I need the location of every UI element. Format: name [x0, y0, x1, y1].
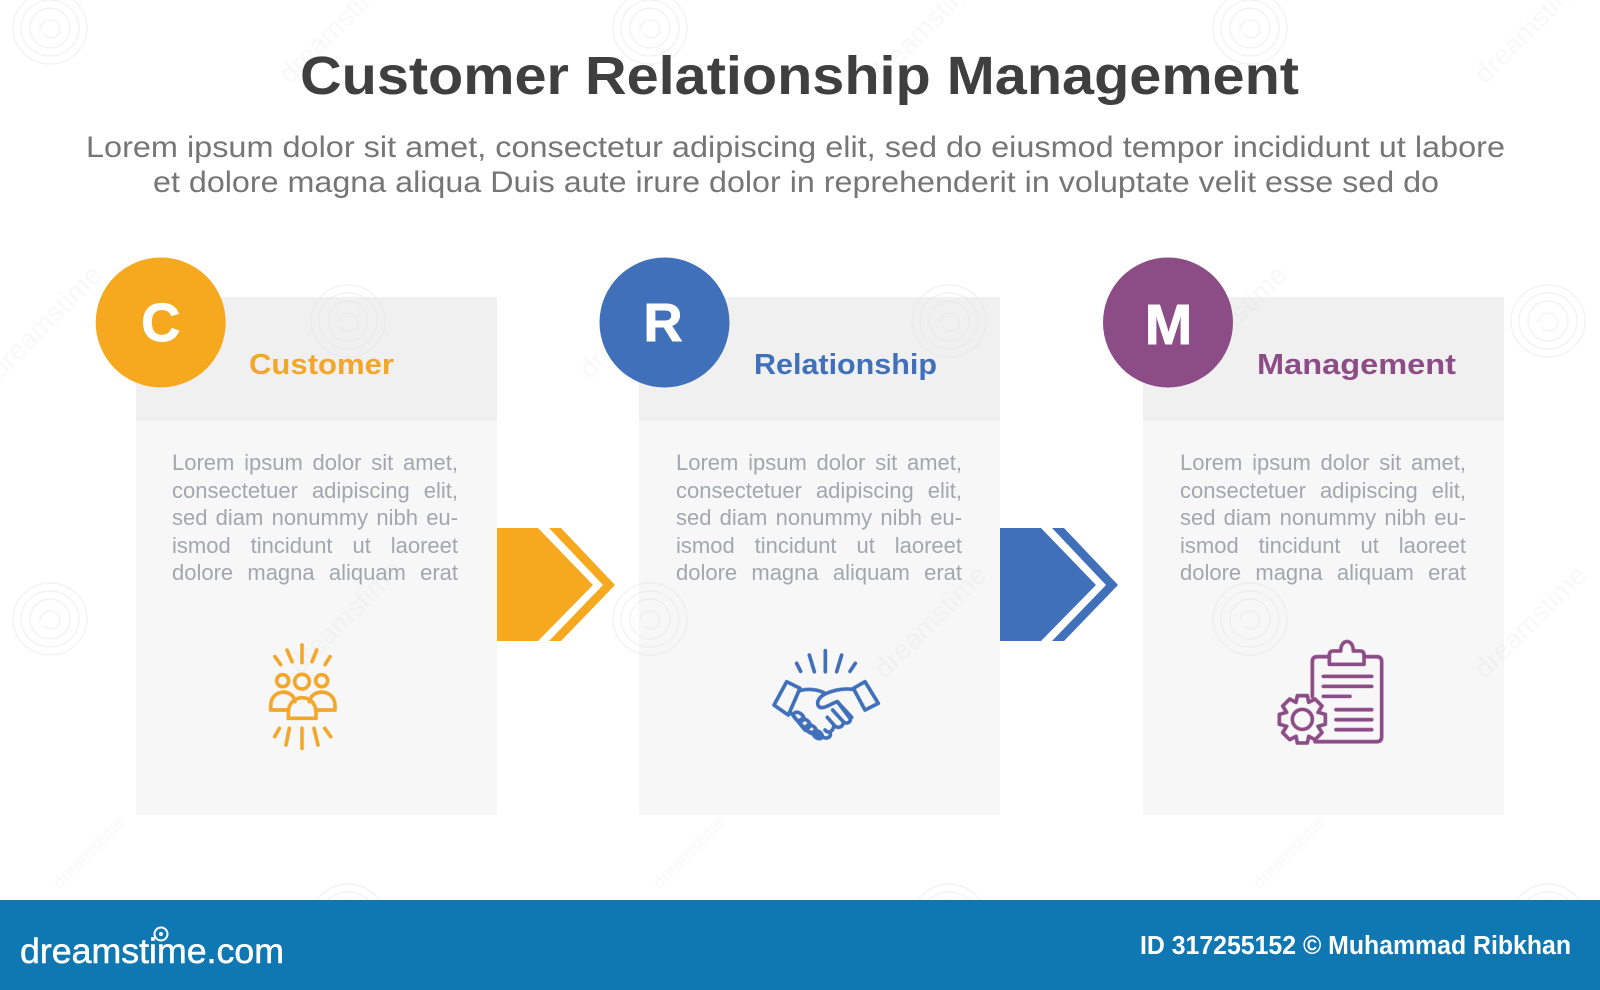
text: dreamstime	[867, 559, 993, 684]
panel: management card	[1143, 297, 1504, 815]
text: dreamstime	[572, 259, 698, 384]
footer credit: ID 317255152 © Muhammad Ribkhan	[1140, 932, 1571, 960]
text: dreamstime	[282, 554, 408, 679]
text: dreamstime	[1167, 259, 1293, 384]
circle badge: M	[1103, 258, 1233, 388]
text block: management description: consectetuer adipiscing elit,	[1180, 478, 1466, 502]
title: Customer Relationship Management	[300, 46, 1299, 106]
circle badge: M: M	[1145, 293, 1192, 357]
text block: relationship description	[676, 449, 962, 589]
heading: Relationship: Relationship	[754, 349, 937, 381]
text block: customer description	[172, 449, 458, 589]
circle badge: R: R	[644, 293, 682, 353]
text block: customer description: dolore magna aliquam erat	[172, 560, 458, 585]
icon: clipboard with gear	[1277, 640, 1384, 746]
text: dreamstime	[649, 812, 729, 893]
text block: management description: dolore magna aliquam erat	[1180, 560, 1466, 585]
circle badge: R	[600, 258, 730, 388]
text block: customer description: consectetuer adipiscing elit,	[172, 478, 458, 502]
text block: relationship description: consectetuer adipiscing elit,	[676, 478, 962, 502]
text block: customer description: Lorem ipsum dolor sit amet,	[172, 450, 458, 475]
footer band	[0, 900, 1600, 990]
panel: customer card	[136, 297, 497, 815]
text block: management description: ismod tincidunt ut laoreet	[1180, 532, 1466, 558]
heading: Customer: Customer	[249, 349, 394, 381]
text block: relationship description: dolore magna aliquam erat	[676, 560, 962, 585]
arrow: customer to relationship	[497, 528, 615, 641]
circle badge: C: C	[141, 293, 180, 353]
text block: management description: Lorem ipsum dolor sit amet,	[1180, 450, 1466, 475]
text block: customer description: sed diam nonummy nibh eu-	[172, 505, 458, 530]
text block: customer description: ismod tincidunt ut laoreet	[172, 532, 458, 558]
text block: relationship description: sed diam nonummy nibh eu-	[676, 505, 962, 530]
arrow: relationship to management	[1000, 528, 1118, 641]
subtitle text: et dolore magna aliqua Duis aute irure dolor in reprehenderit in voluptate velit esse sed do	[153, 166, 1439, 199]
text: dreamstime	[49, 812, 129, 893]
text block: relationship description: ismod tincidunt ut laoreet	[676, 532, 962, 558]
text: dreamstime	[1467, 559, 1593, 684]
icon: customer group	[268, 643, 338, 750]
text block: management description	[1180, 449, 1466, 589]
circle badge: C	[96, 258, 226, 388]
panel: relationship card	[639, 297, 1000, 815]
icon: handshake	[772, 648, 880, 741]
footer logo: dreamstime.com	[20, 932, 284, 971]
text block: relationship description: Lorem ipsum dolor sit amet,	[676, 450, 962, 475]
text: dreamstime	[1249, 812, 1329, 893]
heading: Management: Management	[1257, 349, 1456, 381]
text block: management description: sed diam nonummy nibh eu-	[1180, 505, 1466, 530]
subtitle text	[86, 131, 1505, 199]
subtitle text: Lorem ipsum dolor sit amet, consectetur adipiscing elit, sed do eiusmod tempor incididunt ut labore	[86, 131, 1505, 164]
